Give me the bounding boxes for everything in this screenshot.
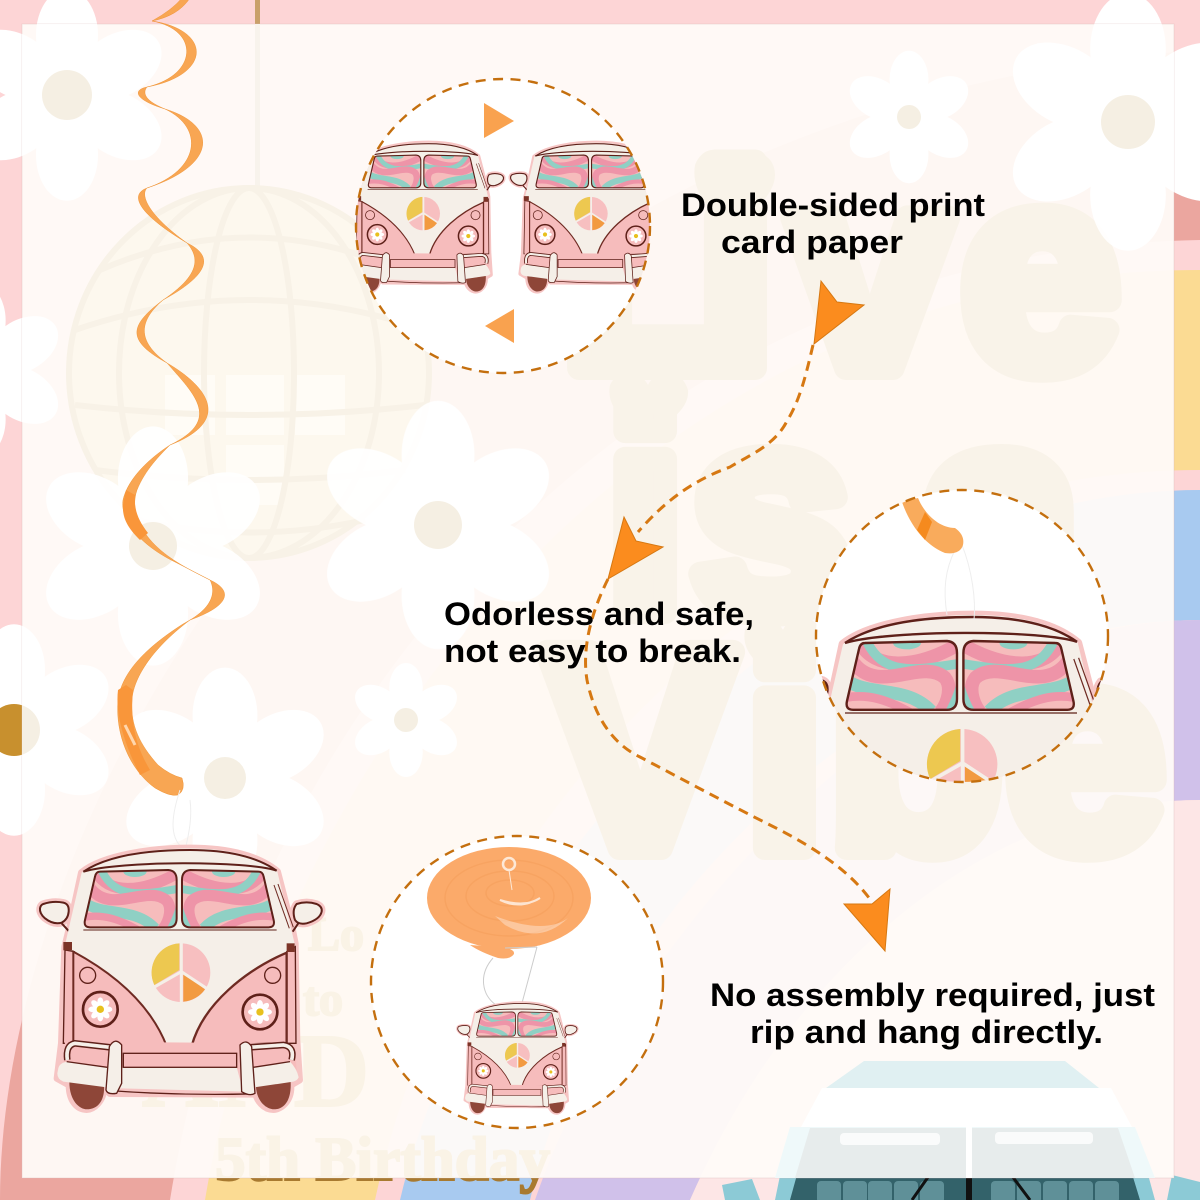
background lettering: party text: AND (142, 1012, 369, 1129)
caption: no assembly required (710, 977, 1155, 1050)
arrowhead 1 (814, 281, 864, 344)
background lettering: Live is a Vibe: Live (560, 111, 1120, 429)
arrowhead 2 (608, 517, 663, 579)
background: daisies outside panel (0, 0, 1200, 888)
strings (483, 947, 537, 1005)
swirl ribbon (117, 0, 225, 795)
orange swirl disc (427, 847, 591, 958)
dashed arrow path 2 (586, 579, 872, 902)
large bus hanging decoration (40, 848, 322, 1109)
icon: flip triangle top (484, 103, 514, 138)
background: disco ball (69, 24, 429, 558)
teal bus roof and highlights (775, 1061, 1155, 1178)
caption: no assembly required: rip and hang directly. (750, 1014, 1103, 1050)
background: teal bus (722, 1127, 1200, 1200)
caption: odorless and safe: Odorless and safe, (444, 596, 754, 632)
detail circle: double-sided buses (343, 79, 671, 373)
arrowhead 3 (844, 889, 890, 951)
background lettering: Live is a Vibe: isa (605, 350, 1083, 674)
detail circle: zoom of bus window and ribbon (814, 488, 1110, 784)
background lettering: party text: Lo (308, 908, 364, 961)
detail circle: unfolded swirl and small bus (371, 836, 663, 1128)
background lettering: party text (142, 918, 539, 1178)
string from ribbon to bus (173, 790, 191, 850)
icon: flip triangle bottom (485, 309, 514, 343)
background lettering: party text: to (303, 973, 343, 1026)
background lettering: party text: 5th Birthday (215, 1126, 550, 1194)
caption: no assembly required: No assembly required, just (710, 977, 1155, 1013)
hanging string above panel (255, 0, 260, 26)
daisies inside panel (0, 0, 1200, 888)
caption: odorless and safe (444, 596, 754, 669)
background lettering: Live is a Vibe (545, 111, 1165, 909)
background lettering: Live is a Vibe: Vibe (545, 591, 1165, 909)
caption: double-sided print: card paper (721, 224, 903, 260)
birthday lettering tail below panel: 5th Birthday (215, 1126, 550, 1194)
caption: odorless and safe: not easy to break. (444, 633, 741, 669)
caption: double-sided print: Double-sided print (681, 187, 985, 223)
caption: double-sided print (681, 187, 985, 260)
dashed arrow path 1 (638, 345, 813, 532)
